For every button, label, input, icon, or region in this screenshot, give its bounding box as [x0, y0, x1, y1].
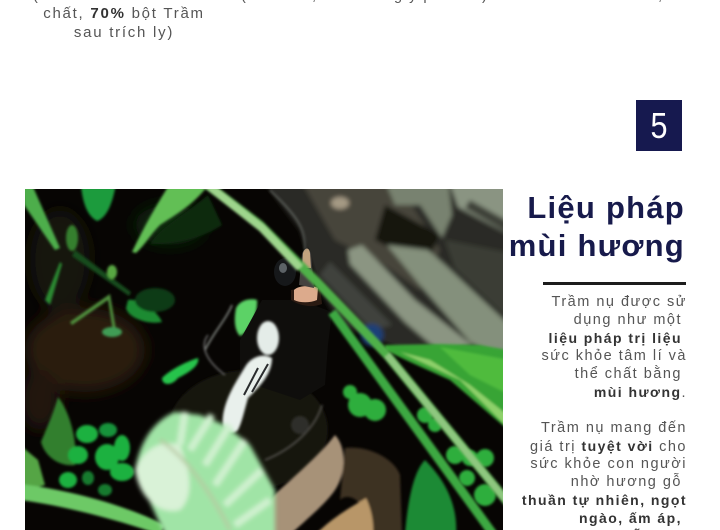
moss and leaves bottom: [20, 385, 496, 530]
photo: incense burner among plants: [25, 189, 503, 530]
body text: Trầm nụ được sử: [552, 294, 687, 310]
incense smoke: [223, 321, 279, 434]
grass blades: [205, 183, 510, 530]
clipped text from previous section: sau trích ly): [74, 24, 174, 41]
fern: [135, 412, 275, 530]
dim brown background: [20, 205, 205, 430]
bright green sprigs: [160, 297, 503, 428]
blurred upper-left plants: [25, 189, 222, 339]
number badge: [636, 100, 682, 151]
body text: Trầm nụ mang đến: [541, 420, 687, 436]
clipped text from previous section: chất, 70% bột Trầm: [43, 5, 205, 22]
body text: ngào, ấm áp,: [579, 510, 682, 526]
divider rule: [543, 282, 686, 285]
number badge: 5: [650, 105, 668, 146]
body text: giá trị tuyệt vời cho: [530, 438, 687, 455]
body text: thể chất bằng: [575, 366, 682, 382]
body text: liệu pháp trị liệu: [549, 330, 682, 346]
body text: dụng như một: [574, 312, 682, 328]
rock wall: [268, 189, 503, 351]
body text: sức khỏe tâm lí và: [542, 348, 687, 364]
body text: sức khỏe con người: [530, 456, 687, 472]
clipped text from previous section: [33, 0, 664, 41]
body text: [522, 294, 687, 530]
heading: Liệu pháp mùi hương: [509, 190, 685, 262]
body text: thuần tự nhiên, ngọt: [522, 492, 687, 508]
tan stones: [262, 435, 402, 530]
hand-shaped incense burner: [168, 190, 332, 490]
body text: mùi hương.: [594, 384, 687, 401]
body text: nhờ hương gỗ: [571, 474, 682, 490]
